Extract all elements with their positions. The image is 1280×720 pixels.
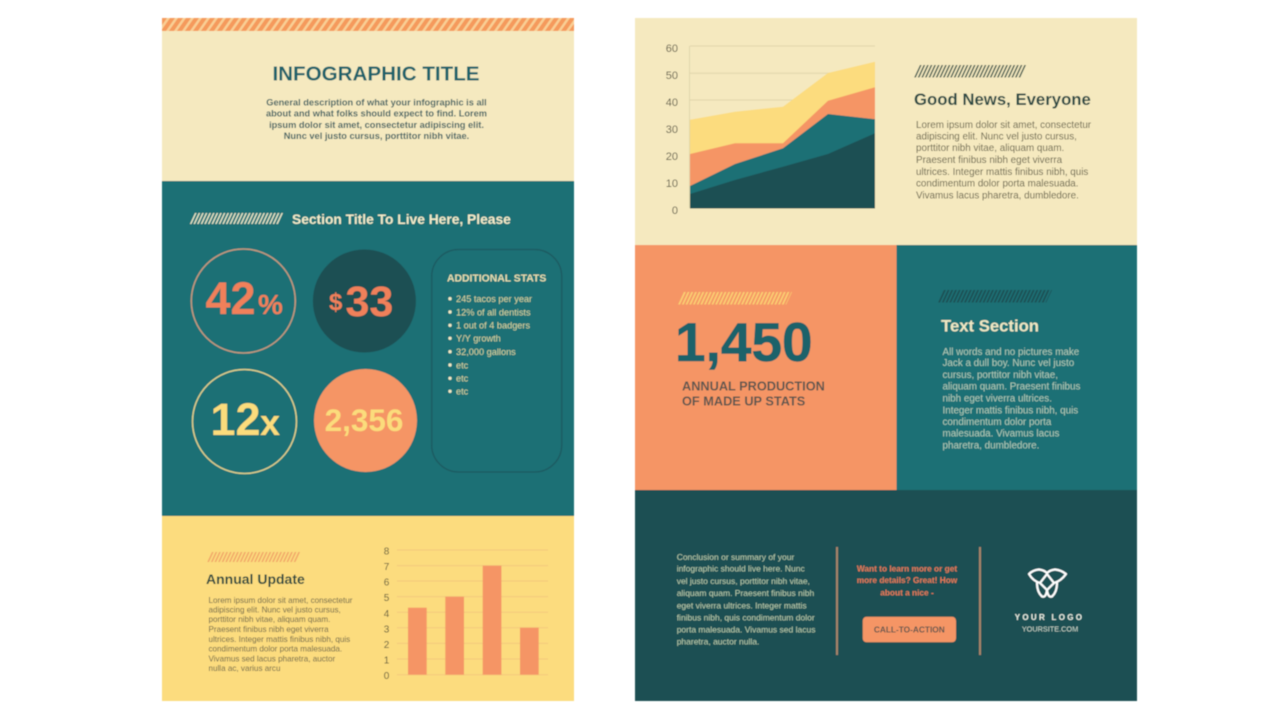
bullet list: 12% of all dentists: [456, 307, 531, 317]
description: General description of what your infographic is all: [266, 98, 487, 108]
conclusion text: finibus nibh, quis condimentum dolor: [677, 612, 815, 622]
good news text: adipiscing elit. Nunc vel justo cursus,: [916, 131, 1077, 142]
big number caption: OF MADE UP STATS: [682, 393, 805, 408]
bullet list: etc: [456, 374, 469, 384]
title: INFOGRAPHIC TITLE: [272, 62, 480, 86]
annual text: porttitor nibh vitae, aliquam quam.: [208, 615, 330, 624]
conclusion text: [677, 552, 815, 647]
bar chart: 4: [384, 609, 390, 620]
stat: 42%: %: [258, 289, 283, 320]
good news heading: Good News, Everyone: [914, 90, 1091, 109]
panel: header: [162, 18, 574, 181]
annual heading: Annual Update: [206, 571, 305, 587]
area chart: 60: [666, 43, 678, 55]
striped top band: [162, 18, 574, 31]
big number hatch: [681, 292, 789, 304]
bar chart: 7: [384, 562, 390, 573]
good news text: [916, 120, 1092, 201]
bullet list: 32,000 gallons: [456, 347, 516, 357]
bullet list: Y/Y growth: [456, 334, 501, 344]
panel: right infographic page: [635, 18, 1137, 701]
big number caption: ANNUAL PRODUCTION: [682, 378, 825, 394]
call to action button: [863, 617, 956, 642]
conclusion text: eget viverra ultrices. Integer mattis: [677, 600, 807, 610]
stat: $33: [313, 250, 416, 352]
good news hatch: [917, 65, 1025, 78]
logo url: YOURSITE.COM: [1022, 625, 1078, 634]
text section body: Integer mattis finibus nibh, quis: [942, 406, 1078, 417]
conclusion text: porta malesuada. Vivamus sed lacus: [677, 624, 815, 634]
stat: 42%: 42: [206, 273, 256, 324]
bar chart: 5: [384, 593, 390, 604]
conclusion text: pharetra, auctor nulla.: [677, 637, 759, 647]
text section body: [942, 347, 1080, 452]
stat: 2,356: 2,356: [325, 402, 403, 438]
description: about and what folks should expect to find. Lorem: [266, 109, 487, 119]
description: [266, 98, 487, 141]
text section body: malesuada. Vivamus lacus: [942, 429, 1059, 440]
stat: 12x: 12: [210, 394, 261, 445]
text section body: Jack a dull boy. Nunc vel justo: [942, 358, 1075, 369]
bullet list: etc: [456, 387, 469, 397]
bullet list: 1 out of 4 badgers: [456, 321, 530, 331]
call to action button: CALL-TO-ACTION: [874, 625, 945, 635]
conclusion text: aliquam quam. Praesent finibus nibh: [677, 588, 814, 598]
panel: left infographic page: [162, 18, 574, 701]
section title: Section Title To Live Here, Please: [292, 212, 511, 227]
panel: big number: [635, 245, 897, 490]
annual hatch: [210, 552, 298, 562]
area chart: 0: [672, 205, 678, 217]
bullet list: etc: [456, 360, 469, 370]
good news text: Vivamus lacus pharetra, dumbledore.: [916, 190, 1079, 201]
conclusion text: infographic should live here. Nunc: [677, 564, 805, 574]
conclusion text: Conclusion or summary of your: [677, 552, 794, 562]
panel: additional stats: [432, 250, 562, 472]
text section body: nibh eget viverra ultrices.: [942, 394, 1052, 405]
bar chart: 6: [384, 578, 390, 589]
description: Nunc vel justo cursus, porttitor nibh vitae.: [284, 131, 469, 141]
bullet list: [448, 294, 532, 397]
good news text: porttitor nibh vitae, aliquam quam.: [916, 143, 1064, 154]
call to action text: Want to learn more or get: [857, 563, 957, 573]
annual text: Vivamus sed lacus pharetra, auctor: [208, 654, 336, 663]
good news text: Lorem ipsum dolor sit amet, consectetur: [916, 120, 1092, 131]
annual text: ultrices. Integer mattis finibus nibh, quis: [208, 635, 350, 644]
section hatch: [192, 213, 282, 224]
panel: good news: [635, 18, 1137, 246]
stat: 2,356: [314, 369, 417, 472]
text section hatch: [941, 290, 1049, 302]
area chart: 20: [666, 151, 678, 163]
annual text: [208, 596, 353, 673]
stat: $33: $: [329, 289, 343, 316]
panel: footer: [635, 490, 1137, 701]
area chart: 40: [666, 97, 678, 109]
panel: statistics section: [162, 181, 574, 516]
logo text: YOUR LOGO: [1015, 613, 1084, 622]
description: ipsum dolor sit amet, consectetur adipiscing elit.: [269, 120, 484, 130]
stat: 12x: [192, 370, 296, 474]
good news text: ultrices. Integer mattis finibus nibh, quis: [916, 167, 1088, 178]
annual text: Lorem ipsum dolor sit amet, consectetur: [208, 596, 353, 605]
call to action text: about a nice -: [880, 587, 934, 597]
annual text: condimentum dolor porta malesuada.: [208, 645, 342, 654]
bullet list: 245 tacos per year: [456, 294, 532, 304]
text section body: cursus, porttitor nibh vitae,: [942, 370, 1058, 381]
call to action text: [857, 563, 958, 597]
bar chart: 2: [384, 640, 390, 651]
call to action text: more details? Great! How: [857, 575, 958, 585]
good news text: Praesent finibus nibh eget viverra: [916, 155, 1063, 166]
area chart: [666, 43, 875, 217]
text section heading: Text Section: [941, 316, 1039, 336]
annual text: Praesent finibus nibh eget viverra: [208, 625, 329, 634]
good news text: condimentum dolor porta malesuada.: [916, 179, 1079, 190]
bar chart: 0: [384, 671, 390, 682]
stat: 12x: x: [260, 402, 280, 443]
annual text: nulla ac, varius arcu: [208, 664, 280, 673]
big number: 1,450: [675, 311, 813, 373]
text section body: pharetra, dumbledore.: [942, 441, 1039, 452]
stat: 42%: [191, 249, 295, 353]
conclusion text: vel justo cursus, porttitor nibh vitae,: [677, 576, 810, 586]
area chart: 10: [666, 178, 678, 190]
annual text: adipiscing elit. Nunc vel justo cursus,: [208, 606, 341, 614]
text section body: aliquam quam. Praesent finibus: [942, 382, 1080, 393]
stat: $33: 33: [346, 278, 393, 326]
bar chart: 3: [384, 624, 390, 635]
big number caption: [682, 378, 825, 408]
area chart: 50: [666, 70, 678, 82]
panel: annual update: [162, 516, 574, 701]
bar chart: 8: [384, 546, 390, 558]
icon: logo: [1029, 570, 1066, 597]
text section body: condimentum dolor porta: [942, 417, 1052, 428]
bar chart: 1: [384, 656, 390, 667]
additional stats heading: ADDITIONAL STATS: [447, 274, 546, 284]
bar chart: [384, 546, 548, 682]
area chart: 30: [666, 124, 678, 136]
panel: text section: [896, 245, 1137, 490]
text section body: All words and no pictures make: [942, 347, 1080, 358]
